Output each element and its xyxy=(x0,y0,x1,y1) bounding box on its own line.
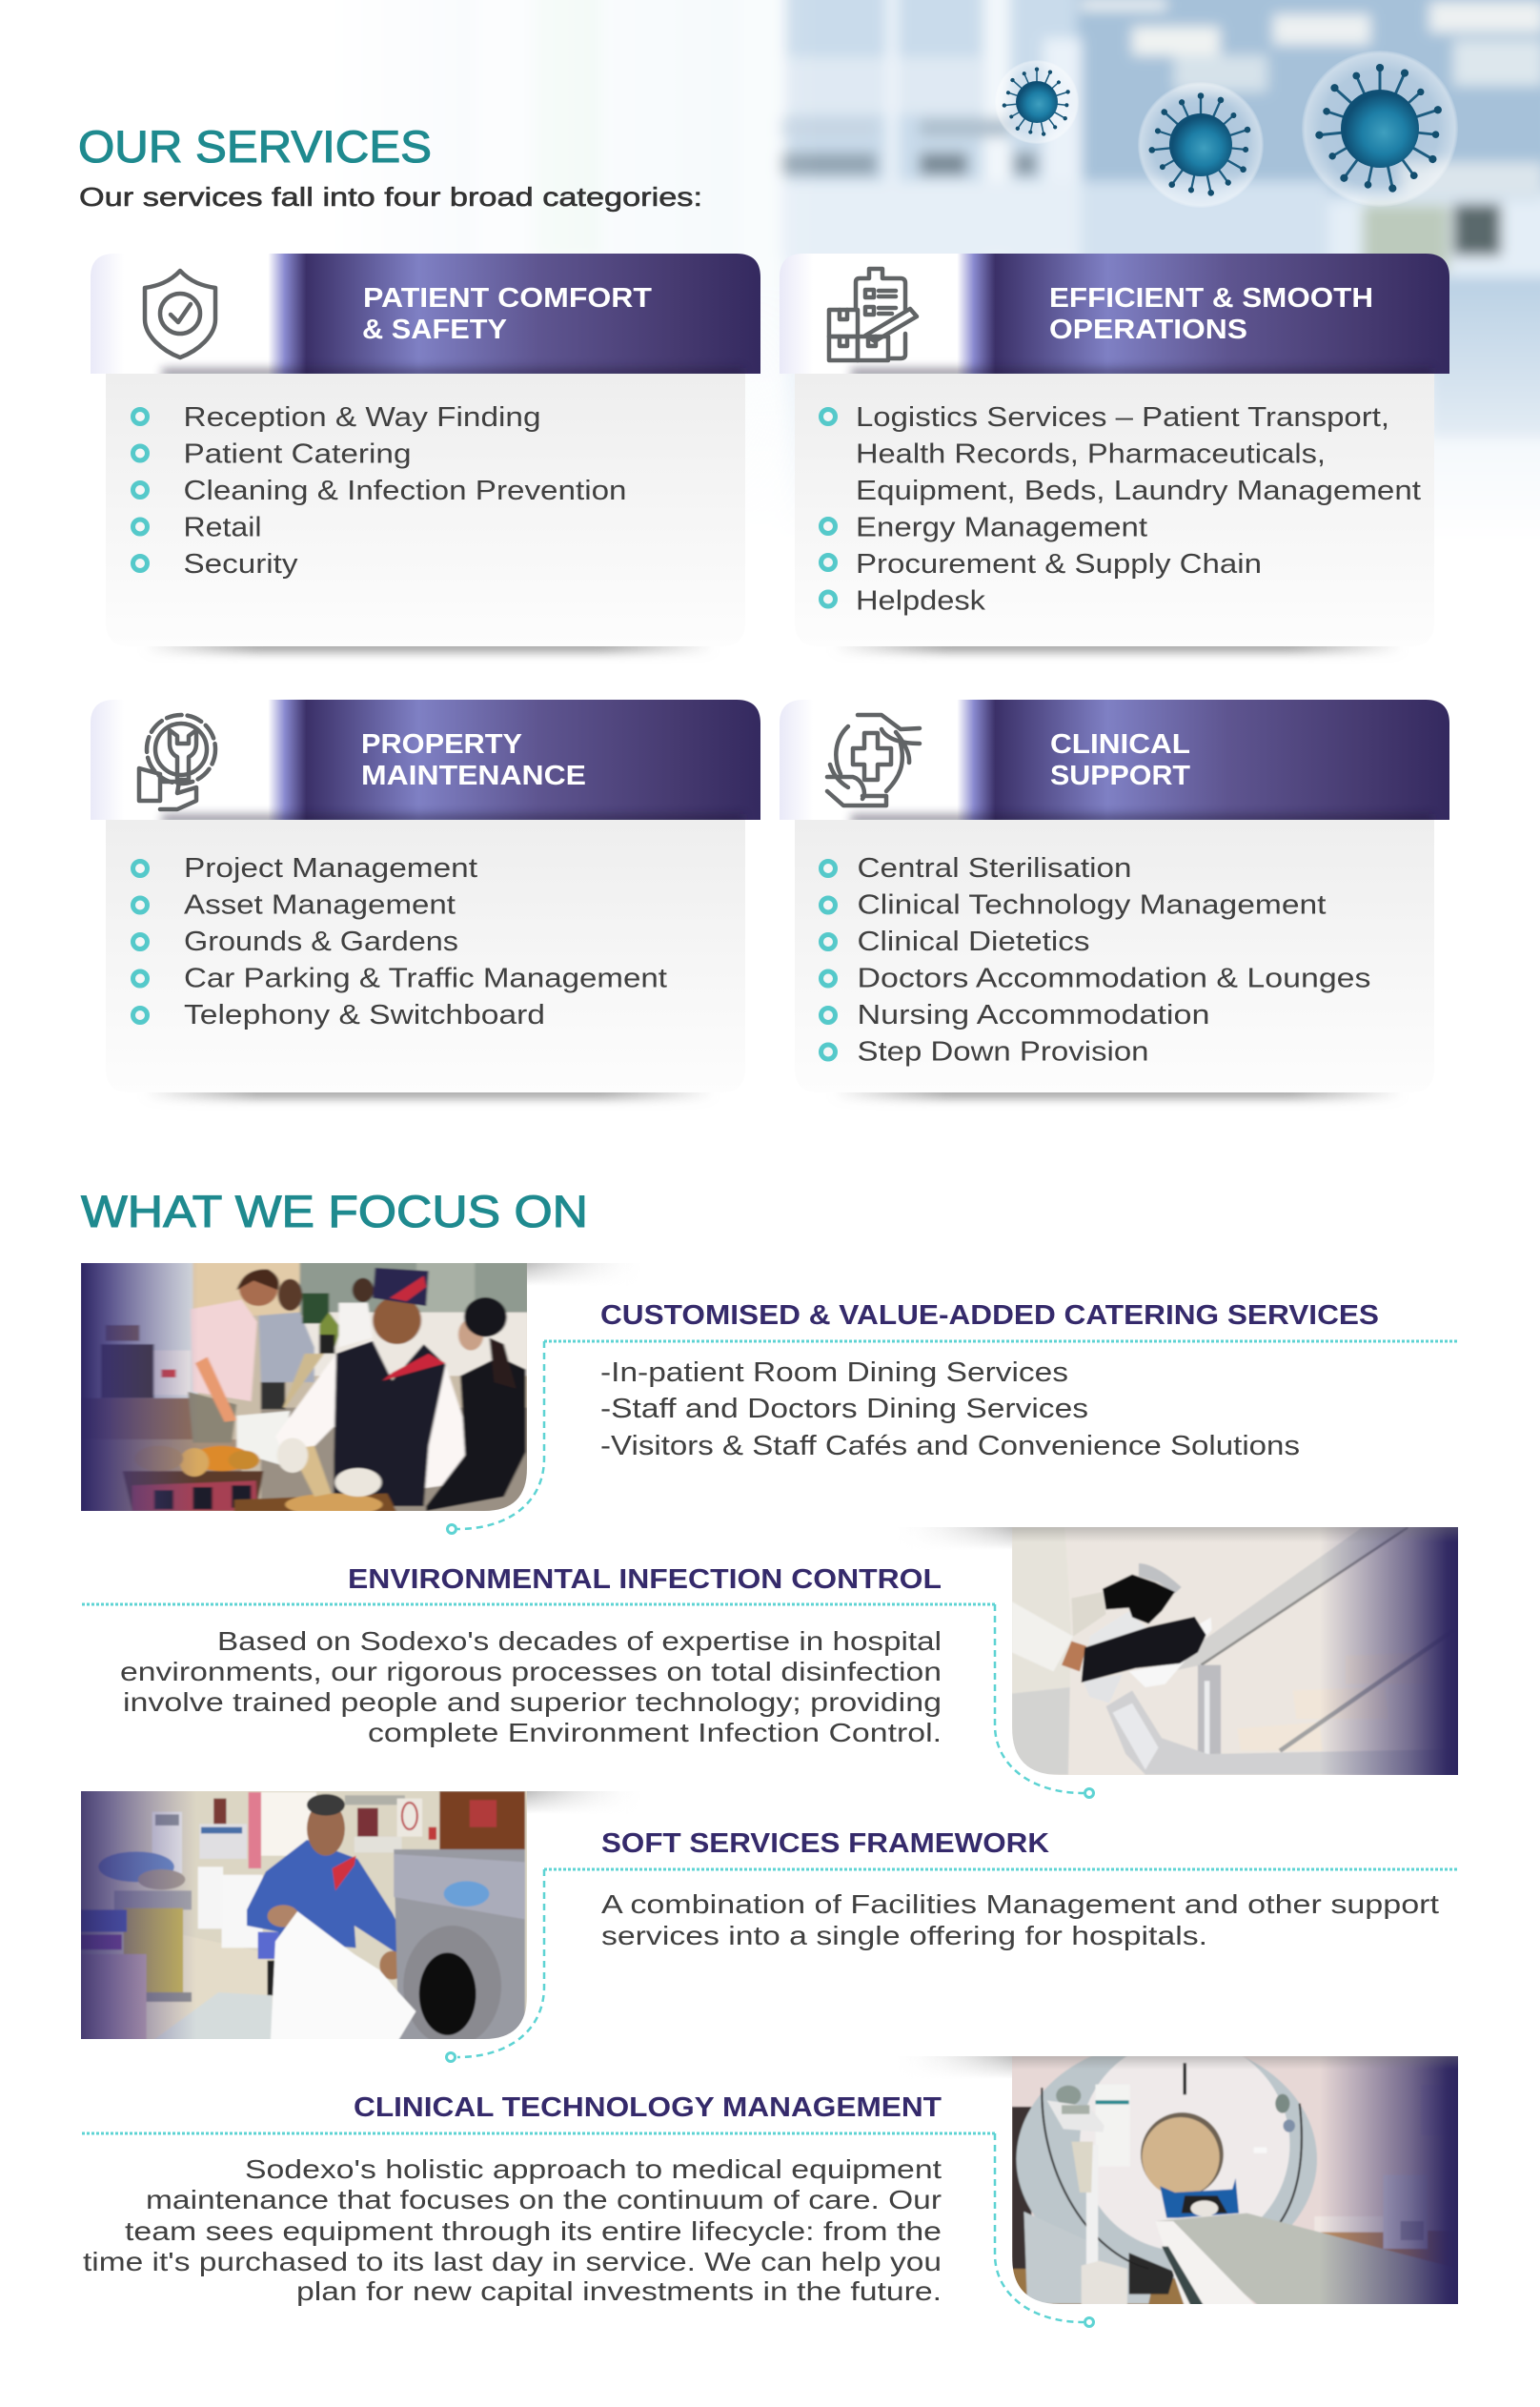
service list: Telephony & Switchboard xyxy=(184,1000,545,1030)
text block: environments, our rigorous processes on total disinfection xyxy=(120,1657,942,1686)
panel heading: OPERATIONS xyxy=(1049,315,1247,345)
text block: time it's purchased to its last day in service. We can help you xyxy=(83,2247,942,2276)
service list xyxy=(821,402,1421,616)
panel: efficient and smooth operations xyxy=(780,254,1449,653)
service list: Grounds & Gardens xyxy=(184,927,458,957)
service list xyxy=(821,853,1370,1068)
text block: Sodexo's holistic approach to medical equipment xyxy=(245,2154,942,2184)
service list: Equipment, Beds, Laundry Management xyxy=(856,476,1421,506)
panel heading: SUPPORT xyxy=(1050,761,1190,791)
service list: Cleaning & Infection Prevention xyxy=(183,476,627,506)
panel heading xyxy=(362,283,652,345)
panel heading: CLINICAL xyxy=(1050,729,1190,760)
panel heading: & SAFETY xyxy=(362,315,507,345)
subheading: CUSTOMISED & VALUE-ADDED CATERING SERVICES xyxy=(600,1300,1379,1331)
service list: Doctors Accommodation & Lounges xyxy=(858,963,1370,993)
service list xyxy=(133,402,627,580)
section: environmental infection control xyxy=(82,1525,1467,1798)
subheading: ENVIRONMENTAL INFECTION CONTROL xyxy=(348,1564,942,1595)
service list: Helpdesk xyxy=(856,585,986,616)
panel: clinical support xyxy=(780,700,1449,1099)
panel heading: PROPERTY xyxy=(361,729,522,760)
section: clinical technology management xyxy=(82,2038,1467,2326)
service list: Energy Management xyxy=(856,513,1147,543)
text block: involve trained people and superior technology; providing xyxy=(123,1687,942,1717)
subheading: CLINICAL TECHNOLOGY MANAGEMENT xyxy=(354,2092,942,2123)
service list: Step Down Provision xyxy=(858,1037,1149,1068)
icon: shield with check xyxy=(145,271,215,357)
panel heading: MAINTENANCE xyxy=(361,761,586,791)
text block xyxy=(120,1626,942,1747)
photo: gloved hands disinfecting a handrail xyxy=(1007,1525,1467,1780)
text block: -Staff and Doctors Dining Services xyxy=(600,1394,1088,1424)
panel heading xyxy=(1049,283,1373,345)
panel heading: EFFICIENT & SMOOTH xyxy=(1049,283,1373,314)
panel: patient comfort and safety xyxy=(91,254,760,653)
service list: Clinical Dietetics xyxy=(858,927,1090,957)
service list: Health Records, Pharmaceuticals, xyxy=(856,439,1326,469)
subheading: SOFT SERVICES FRAMEWORK xyxy=(601,1828,1049,1859)
service list: Asset Management xyxy=(184,890,456,921)
service list: Retail xyxy=(183,513,261,543)
service list: Project Management xyxy=(184,853,477,884)
icon: hands around medical cross xyxy=(827,715,920,806)
virus particles xyxy=(995,51,1458,208)
connector: dashed line with end ring xyxy=(82,1604,1094,1798)
section: soft services framework xyxy=(76,1789,1459,2061)
background: blurred hospital corridor xyxy=(542,0,1540,463)
text block xyxy=(601,1889,1439,1950)
service list: Procurement & Supply Chain xyxy=(856,549,1262,580)
service list: Logistics Services – Patient Transport, xyxy=(856,402,1389,433)
photo: catering staff serving food xyxy=(76,1261,533,1516)
service list: Patient Catering xyxy=(183,439,412,469)
heading: our services: OUR SERVICES xyxy=(78,121,432,172)
service list: Reception & Way Finding xyxy=(183,402,541,433)
intro text: Our services fall into four broad categories: xyxy=(79,182,702,212)
photo: CT scanner xyxy=(1012,2056,1458,2304)
text block: services into a single offering for hospitals. xyxy=(601,1921,1207,1950)
text block xyxy=(600,1357,1300,1461)
text block: complete Environment Infection Control. xyxy=(368,1718,942,1747)
service list: Central Sterilisation xyxy=(858,853,1132,884)
panel heading: PATIENT COMFORT xyxy=(363,283,652,314)
text block: maintenance that focuses on the continuum of care. Our xyxy=(146,2185,942,2214)
service list: Car Parking & Traffic Management xyxy=(184,963,667,993)
text block xyxy=(83,2154,942,2306)
text block: -In-patient Room Dining Services xyxy=(600,1357,1068,1388)
service list: Nursing Accommodation xyxy=(858,1000,1210,1030)
icon: clipboard and boxes xyxy=(829,269,917,360)
service list xyxy=(133,853,667,1030)
connector: dashed line with end ring xyxy=(448,1341,1459,1533)
text block: -Visitors & Staff Cafés and Convenience Solutions xyxy=(600,1431,1300,1461)
connector: dashed line with end ring xyxy=(82,2133,1094,2326)
text block: plan for new capital investments in the future. xyxy=(296,2276,942,2306)
panel: property maintenance xyxy=(91,700,760,1099)
text block: Based on Sodexo's decades of expertise in hospital xyxy=(217,1626,942,1656)
icon: gear with wrench and hand xyxy=(139,715,215,809)
photo: laundry worker with sheet xyxy=(76,1789,532,2047)
service list: Clinical Technology Management xyxy=(858,890,1327,921)
service list: Security xyxy=(183,549,298,580)
text block: team sees equipment through its entire lifecycle: from the xyxy=(125,2216,942,2246)
text block: A combination of Facilities Management and other support xyxy=(601,1889,1439,1919)
panel heading xyxy=(361,729,586,791)
panel heading xyxy=(1050,729,1190,791)
section: catering services xyxy=(76,1261,1459,1533)
heading: what we focus on: WHAT WE FOCUS ON xyxy=(81,1186,588,1236)
connector: dashed line with end ring xyxy=(446,1869,1459,2061)
